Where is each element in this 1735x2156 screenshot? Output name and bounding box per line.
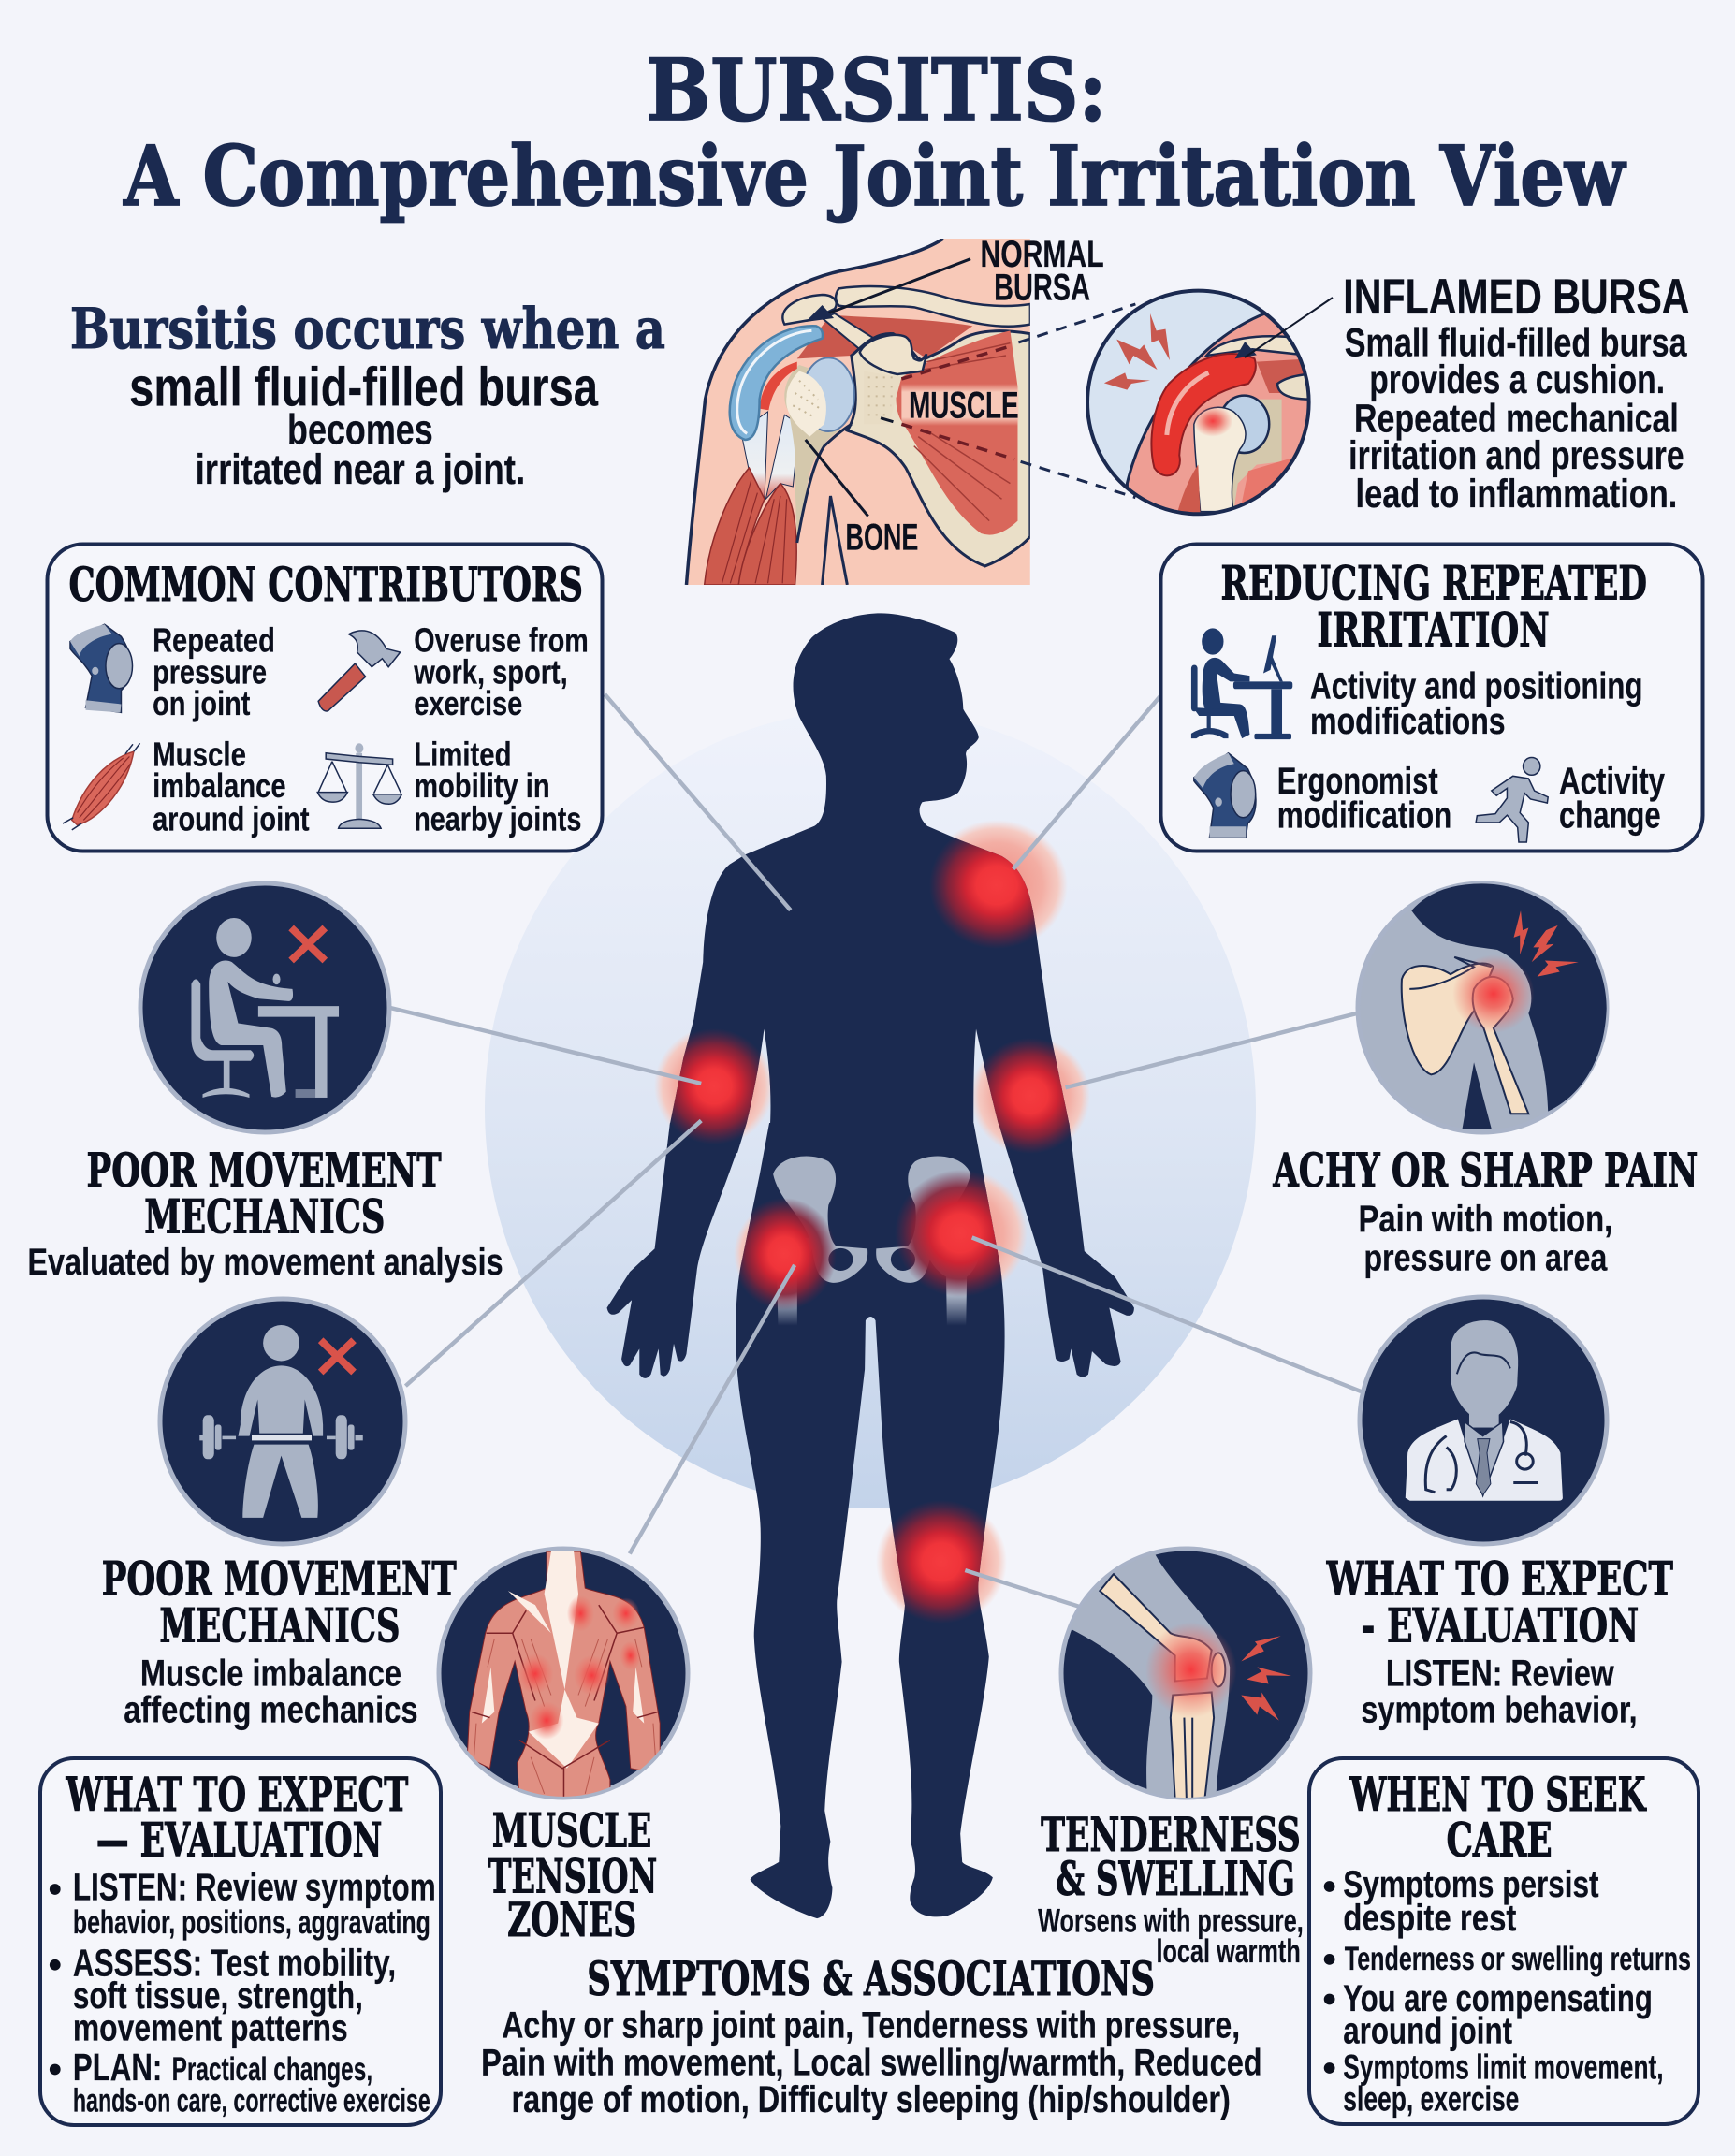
bullet list: sleep, exercise — [1343, 2080, 1519, 2119]
bullet list: Symptoms persist — [1343, 1864, 1599, 1905]
scapula — [847, 331, 1030, 566]
connector lines — [390, 694, 1361, 1609]
icon: knee brace — [70, 624, 133, 712]
heading and list text: Limited — [414, 735, 512, 773]
heading — [1349, 1767, 1647, 1868]
label: tenderness and swelling: & SWELLING — [1056, 1851, 1295, 1906]
icon: balance scales — [317, 743, 401, 828]
heading and list text: on joint — [153, 684, 250, 722]
heading and list text: around joint — [153, 800, 310, 838]
icon: shoulder pain — [1358, 883, 1607, 1132]
body figure with inflamed joints — [607, 613, 1134, 1918]
heading: — EVALUATION — [96, 1813, 382, 1868]
glow: right shoulder — [932, 838, 1037, 947]
label: achy or sharp pain: Pain with motion, — [1358, 1199, 1612, 1240]
panel: reducing repeated irritation — [1160, 545, 1703, 852]
icon: running person — [1476, 757, 1548, 842]
inflamed bursa text: provides a cushion. — [1369, 357, 1665, 402]
label: poor movement mechanics (lifting): Muscle imbalance — [140, 1653, 401, 1694]
heading and list text — [68, 557, 589, 838]
silhouette upper body — [666, 613, 1072, 1153]
heading and list text: Repeated — [153, 620, 275, 659]
inflamed bursa text — [1343, 270, 1690, 517]
icon: person at desk — [1191, 628, 1292, 739]
anatomy labels: MUSCLE — [909, 386, 1019, 427]
leader lines and arrows — [806, 259, 1135, 517]
label: poor movement mechanics (lifting): MECHANICS — [159, 1597, 401, 1653]
label: achy or sharp pain — [1273, 1143, 1698, 1279]
text block: symptoms and associations: Pain with movement, Local swelling/warmth, Reduced — [481, 2042, 1262, 2083]
bullet list: hands-on care, corrective exercise — [73, 2082, 430, 2119]
text block: symptoms and associations: range of motion, Difficulty sleeping (hip/shoulder) — [512, 2079, 1231, 2120]
small icons — [63, 624, 401, 830]
icon: knee brace — [1194, 753, 1256, 838]
label: poor movement mechanics (lifting) — [102, 1551, 457, 1730]
label: poor movement mechanics (lifting): POOR MOVEMENT — [102, 1551, 457, 1607]
magnified inflamed bursa — [1087, 291, 1311, 515]
text block: symptoms and associations — [481, 1951, 1262, 2120]
heading and text: change — [1559, 795, 1661, 837]
humerus — [784, 365, 840, 535]
title: BURSITIS: — [646, 40, 1107, 140]
normal bursa — [730, 326, 823, 440]
background disc behind body — [485, 709, 1256, 1508]
pale glow halos behind body — [654, 820, 1090, 1625]
label: tenderness and swelling: Worsens with pressure, — [1038, 1903, 1304, 1940]
bullet list: PLAN: — [73, 2046, 162, 2089]
icon: knee pain — [1047, 1543, 1310, 1802]
label: muscle tension zones: ZONES — [507, 1892, 636, 1947]
heading: WHAT TO EXPECT — [66, 1767, 408, 1822]
intro text block: becomes — [287, 406, 433, 454]
heading and text: modifications — [1310, 701, 1506, 742]
text block: symptoms and associations: Achy or sharp joint pain, Tenderness with pressure, — [502, 2005, 1240, 2047]
biceps muscles — [705, 468, 765, 585]
glow: left hip — [732, 1198, 837, 1310]
scapular muscle — [896, 330, 1017, 535]
label: what to expect evaluation (right): - EVALUATION — [1361, 1597, 1639, 1653]
label: tenderness and swelling: local warmth — [1157, 1933, 1301, 1970]
title — [123, 40, 1626, 225]
inflamed bursa leader line — [1245, 298, 1333, 357]
label: what to expect evaluation (right): symptom behavior, — [1361, 1689, 1638, 1730]
label: achy or sharp pain: pressure on area — [1363, 1238, 1608, 1279]
label: tenderness and swelling: TENDERNESS — [1041, 1807, 1301, 1862]
bullet list: behavior, positions, aggravating — [73, 1904, 430, 1941]
bullet list: ASSESS: Test mobility, — [73, 1942, 396, 1985]
heading and list text: mobility in — [414, 766, 550, 805]
heading and list text: exercise — [414, 684, 522, 722]
heading and list text: nearby joints — [414, 800, 581, 838]
anatomy labels: BONE — [845, 517, 918, 559]
label: muscle tension zones: MUSCLE — [492, 1802, 651, 1857]
silhouette lower body — [607, 1123, 1134, 1918]
anatomy labels: BURSA — [994, 267, 1090, 308]
icon: bad lifting with barbell — [160, 1299, 405, 1544]
bullet list — [50, 1866, 436, 2119]
heading and text — [1221, 556, 1665, 837]
anatomy labels: NORMAL — [980, 234, 1104, 275]
glow: right hip — [897, 1171, 1001, 1296]
heading and list text: imbalance — [153, 766, 286, 805]
label: poor movement mechanics (desk): POOR MOVEMENT — [87, 1143, 442, 1198]
skin area — [686, 239, 1030, 585]
label: poor movement mechanics (desk): MECHANICS — [144, 1188, 385, 1244]
label: muscle tension zones — [488, 1802, 657, 1947]
label: tenderness and swelling — [1038, 1807, 1304, 1970]
icon: poor posture at desk — [140, 883, 389, 1132]
text block: symptoms and associations: SYMPTOMS & ASSOCIATIONS — [587, 1951, 1155, 2006]
bullet list — [1324, 1864, 1691, 2119]
heading and list text: Muscle — [153, 735, 246, 773]
heading and text: Ergonomist — [1277, 761, 1438, 802]
label: muscle tension zones: TENSION — [488, 1849, 657, 1904]
label: what to expect evaluation (right) — [1326, 1551, 1673, 1730]
pelvis bones — [764, 1157, 982, 1326]
bullet list: You are compensating — [1343, 1978, 1653, 2019]
bullet list: soft tissue, strength, — [73, 1975, 363, 2017]
heading and text: IRRITATION — [1317, 603, 1550, 658]
pain bolts — [1104, 313, 1170, 390]
intro text block: Bursitis occurs when a — [70, 296, 665, 362]
intro text block: small fluid-filled bursa — [129, 357, 599, 417]
heading: CARE — [1446, 1813, 1553, 1868]
glow: knee — [893, 1502, 986, 1622]
heading and list text: pressure — [153, 652, 267, 691]
heading and text: Activity and positioning — [1310, 665, 1643, 707]
inflamed bursa arrow — [1235, 342, 1257, 358]
bullet list: around joint — [1343, 2011, 1512, 2052]
heading and list text: Overuse from — [414, 620, 589, 659]
label: poor movement mechanics (lifting): affecting mechanics — [124, 1689, 418, 1730]
tendons — [741, 412, 768, 499]
red glows inside the body — [656, 822, 1088, 1624]
icon: back muscle tension zones — [439, 1549, 688, 1799]
panel: what to expect evaluation — [40, 1758, 441, 2125]
heading and list text: work, sport, — [413, 652, 568, 691]
intro text block: irritated near a joint. — [196, 445, 525, 493]
bullet list: Practical changes, — [172, 2051, 372, 2088]
label: poor movement mechanics (desk): Evaluated by movement analysis — [27, 1242, 503, 1283]
glow: left elbow — [670, 1030, 760, 1143]
panel: when to seek care — [1309, 1758, 1699, 2124]
intro text block — [70, 296, 665, 493]
armpit line — [823, 496, 847, 585]
bullet list: movement patterns — [73, 2008, 348, 2049]
anatomy labels — [845, 234, 1104, 559]
heading and text: Activity — [1559, 761, 1665, 802]
heading and list text: COMMON CONTRIBUTORS — [68, 557, 583, 612]
panel: common contributors — [47, 545, 603, 852]
shoulder anatomy illustration — [686, 239, 1311, 585]
label: poor movement mechanics (desk) — [27, 1143, 503, 1283]
bullet list: despite rest — [1343, 1898, 1516, 1939]
icon: hammer — [318, 631, 401, 711]
icon: doctor — [1360, 1297, 1607, 1544]
small icons — [1191, 628, 1548, 842]
heading and text: modification — [1277, 795, 1451, 837]
icon: muscle — [63, 743, 140, 830]
label: what to expect evaluation (right): LISTEN: Review — [1386, 1653, 1614, 1694]
bullet list: LISTEN: Review symptom — [73, 1866, 436, 1909]
glow: right elbow — [984, 1040, 1071, 1152]
heading — [66, 1767, 408, 1868]
